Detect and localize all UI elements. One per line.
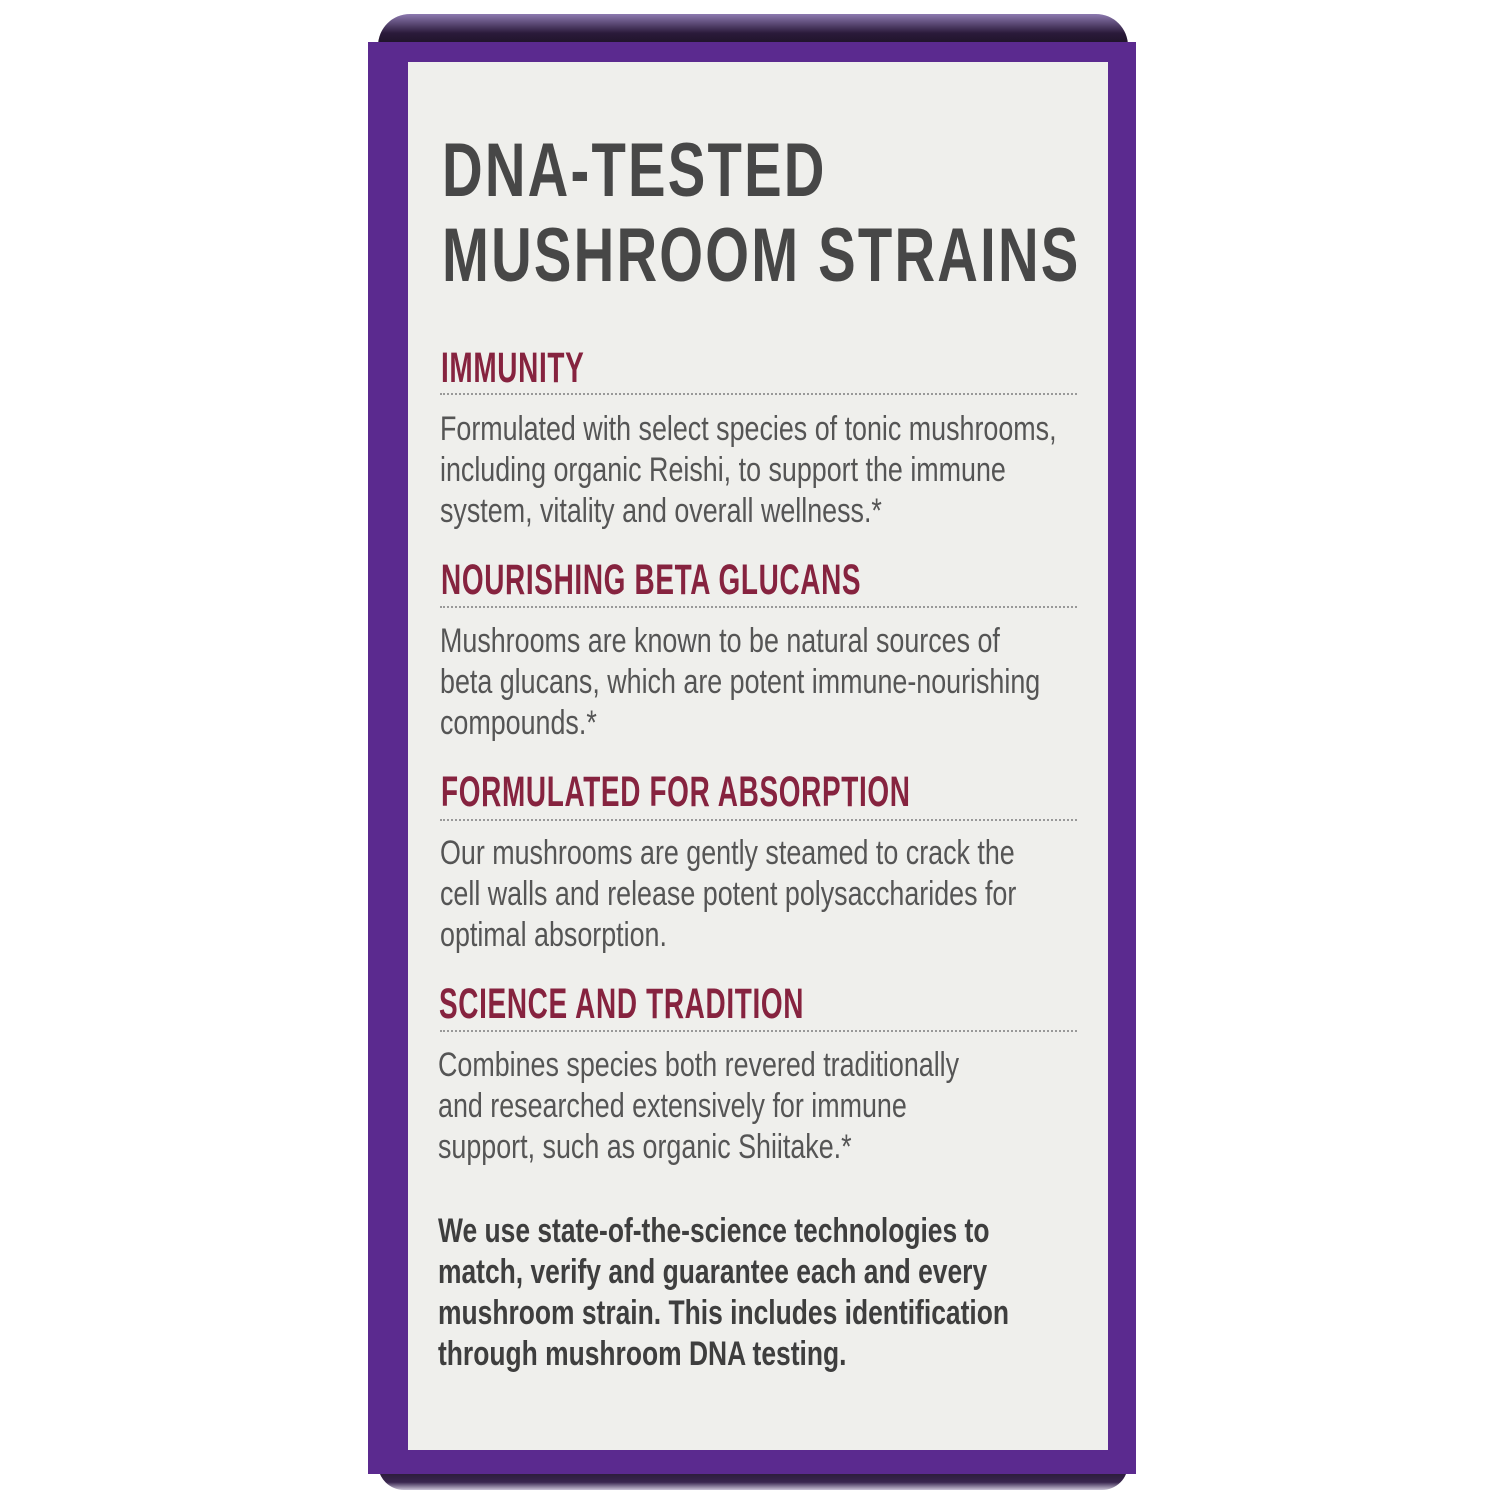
section: science and tradition: Combines species both revered traditionally: [438, 1046, 959, 1084]
title: MUSHROOM STRAINS: [442, 213, 1081, 298]
section: immunity: IMMUNITY: [441, 344, 584, 392]
title: [442, 128, 1081, 298]
section: absorption: Our mushrooms are gently steamed to crack the: [440, 834, 1015, 872]
section: absorption: FORMULATED FOR ABSORPTION: [441, 768, 911, 816]
inner white panel: [408, 62, 1108, 1450]
section: beta glucans: Mushrooms are known to be natural sources of: [440, 622, 1000, 660]
section: beta glucans: NOURISHING BETA GLUCANS: [441, 556, 861, 604]
section: beta glucans: [440, 556, 1077, 742]
bottom dark flap: [378, 1464, 1128, 1490]
section: science and tradition: support, such as organic Shiitake.*: [438, 1128, 852, 1166]
section: beta glucans: beta glucans, which are potent immune-nourishing: [440, 663, 1040, 701]
closing statement: through mushroom DNA testing.: [438, 1335, 846, 1373]
section: absorption: optimal absorption.: [440, 916, 667, 954]
section: immunity: [440, 344, 1077, 530]
section: immunity: system, vitality and overall wellness.*: [440, 492, 882, 530]
closing statement: mushroom strain. This includes identification: [438, 1294, 1009, 1332]
section: immunity: including organic Reishi, to support the immune: [440, 451, 1006, 489]
box: purple packaging: [368, 14, 1136, 1490]
top dark flap: [378, 14, 1128, 46]
closing statement: We use state-of-the-science technologies to: [438, 1212, 989, 1250]
section: beta glucans: compounds.*: [440, 704, 597, 742]
section: absorption: cell walls and release potent polysaccharides for: [440, 875, 1016, 913]
closing statement: match, verify and guarantee each and every: [438, 1253, 987, 1291]
title: DNA-TESTED: [442, 128, 827, 213]
section: science and tradition: and researched extensively for immune: [438, 1087, 907, 1125]
section: science and tradition: [438, 980, 1077, 1166]
section: immunity: Formulated with select species of tonic mushrooms,: [440, 410, 1057, 448]
closing statement: [438, 1212, 1009, 1373]
section: absorption: [440, 768, 1077, 954]
purple frame: [368, 42, 1136, 1474]
section: science and tradition: SCIENCE AND TRADITION: [439, 980, 804, 1028]
